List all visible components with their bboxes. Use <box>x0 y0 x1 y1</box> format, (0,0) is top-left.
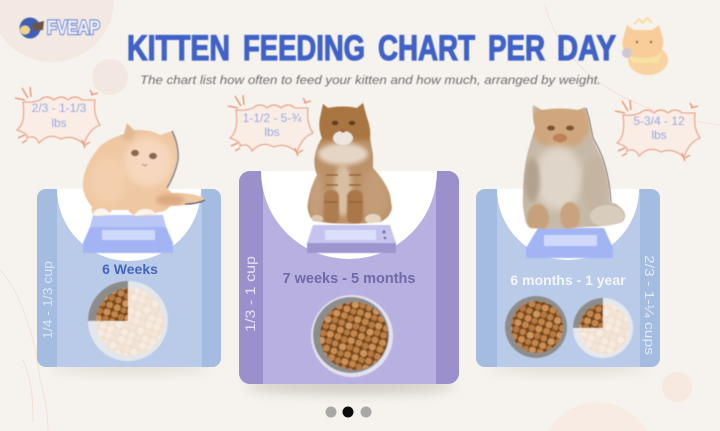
label: 2/3 - 1-1/3 lbs: 2/3 - 1-1/3 <box>32 101 87 115</box>
logo <box>20 18 100 39</box>
side label: 1/3 - 1 cup <box>242 256 258 332</box>
age label: 6 Weeks <box>102 261 158 277</box>
panel: 7 weeks - 5 months <box>239 83 459 394</box>
label: 5-3/4 - 12 lbs: lbs <box>651 128 667 142</box>
bowl: quarter cup <box>88 281 168 361</box>
title: DAY <box>557 29 616 68</box>
label: 5-3/4 - 12 lbs <box>615 100 700 161</box>
side label: 1/4 - 1/3 cup <box>41 261 55 339</box>
bowl: quarter cup <box>573 298 633 358</box>
logo: FVEAP <box>47 18 100 39</box>
bowl: full <box>311 295 393 377</box>
age label: 6 months - 1 year <box>510 272 626 288</box>
title: PER <box>488 29 545 68</box>
title <box>127 29 616 68</box>
cat: tabby <box>306 102 393 224</box>
scale <box>526 228 613 258</box>
label: 2/3 - 1-1/3 lbs <box>15 87 100 148</box>
cat: persian <box>522 104 626 230</box>
kitten <box>80 120 210 220</box>
label: 1-1/2 - 5-3/4 lbs <box>228 95 313 156</box>
pagination dots <box>326 406 372 418</box>
side label: 2/3 - 1-¼ cups <box>642 255 657 356</box>
title: KITTEN <box>127 29 230 68</box>
panel: 6 months - 1 year <box>476 100 660 374</box>
subtitle: The chart list how often to feed your kitten and how much, arranged by weight. <box>140 75 601 87</box>
label: 5-3/4 - 12 lbs: 5-3/4 - 12 <box>633 114 685 128</box>
panel: 6 weeks <box>37 117 221 374</box>
title: FEEDING <box>243 29 365 68</box>
scale <box>307 225 396 253</box>
bowl: full <box>505 296 567 358</box>
scale <box>83 215 173 253</box>
label: 1-1/2 - 5-3/4 lbs: lbs <box>264 125 280 139</box>
label: 1-1/2 - 5-3/4 lbs: 1-1/2 - 5-¾ <box>243 111 302 125</box>
age label: 7 weeks - 5 months <box>283 271 415 287</box>
title: CHART <box>378 29 475 68</box>
label: 2/3 - 1-1/3 lbs: lbs <box>51 116 67 130</box>
icon: cartoon cat <box>622 18 668 75</box>
